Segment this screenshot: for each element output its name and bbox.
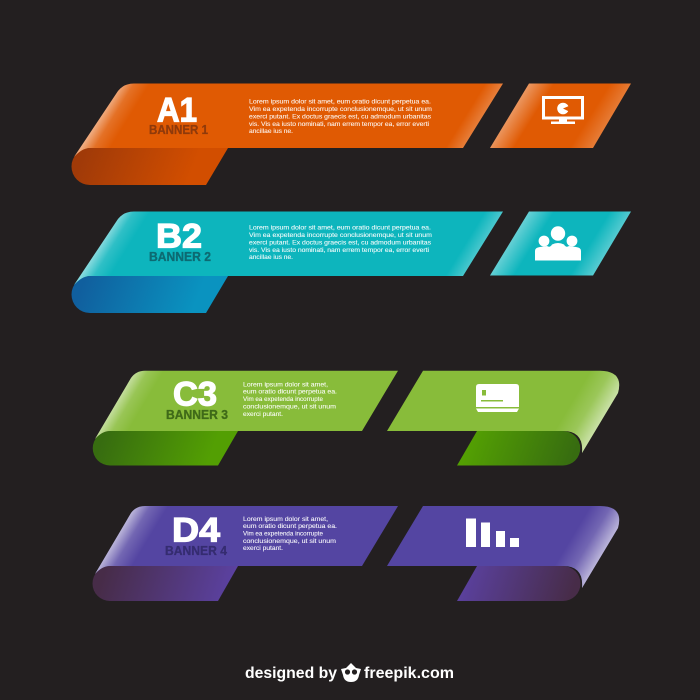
icon: people [535,226,581,260]
banner D4 [92,506,398,601]
text block A1: vis. Vis ea iusto nominati, nam errem tempor ea, error everti [249,121,430,128]
panel C3 fold [457,431,580,466]
label BANNER 3: BANNER 3 [166,408,228,422]
banner A1 [72,84,503,185]
banner A1 fold [72,148,228,185]
panel C3 main ribbon [387,371,619,453]
icon: bar chart [466,518,519,547]
text block B2: Lorem ipsum dolor sit amet, eum oratio dicunt perpetua ea. [249,225,431,232]
footer credit [245,663,454,682]
icon: monitor [542,96,584,124]
text block D4: exerci putant. [243,545,283,552]
text block D4 [243,516,337,552]
heading C3: C3 [173,376,217,414]
panel D4 fold [457,566,580,601]
footer credit: designed by [245,665,337,682]
text block B2: vis. Vis ea iusto nominati, nam errem tempor ea, error everti [249,247,430,254]
text block C3: Lorem ipsum dolor sit amet, [243,381,328,388]
text block C3 [243,381,337,418]
banner B2 [72,212,503,313]
text block C3: exerci putant. [243,411,283,418]
banner C3 main ribbon [95,371,398,439]
footer credit: freepik.com [364,665,454,682]
banner B2 main ribbon [74,212,503,285]
panel D4 with bar icon [387,506,619,601]
label BANNER 1: BANNER 1 [149,123,208,137]
icon: credit card [476,384,519,412]
heading D4: D4 [172,512,220,550]
text block A1: Lorem ipsum dolor sit amet, eum oratio dicunt perpetua ea. [249,99,431,106]
heading B2: B2 [156,218,202,256]
panel C3 with card icon [387,371,619,466]
text block B2: exerci putant. Ex doctus graecis est, cu admodum urbanitas [249,239,432,246]
banner D4 fold [92,566,238,601]
text block A1: exerci putant. Ex doctus graecis est, cu admodum urbanitas [249,113,432,120]
text block A1: Vim ea expetenda incorrupte conclusionemque, ut sit unum [249,106,433,113]
text block B2 [249,225,433,261]
label BANNER 4: BANNER 4 [165,544,227,558]
text block D4: Vim ea expetenda incorrupte [243,530,323,537]
panel B2 with people icon [490,212,631,276]
text block D4: Lorem ipsum dolor sit amet, [243,516,328,523]
banner C3 fold [93,431,238,466]
heading A1: A1 [157,92,197,130]
text block A1: ancillae ius ne. [249,128,293,135]
label BANNER 2: BANNER 2 [149,250,211,264]
text block C3: conclusionemque, ut sit unum [243,403,337,410]
banner A1 main ribbon [74,84,503,157]
text block B2: ancillae ius ne. [249,254,293,261]
banner C3 [93,371,398,466]
text block A1 [249,99,433,135]
banner D4 main ribbon [95,506,398,574]
text block C3: Vim ea expetenda incorrupte [243,396,323,403]
text block D4: eum oratio dicunt perpetua ea. [243,523,337,530]
icon: freepik mascot [341,663,361,682]
text block B2: Vim ea expetenda incorrupte conclusionemque, ut sit unum [249,232,433,239]
panel A1 with monitor icon [490,84,631,148]
banner B2 fold [72,276,228,313]
text block D4: conclusionemque, ut sit unum [243,538,337,545]
text block C3: eum oratio dicunt perpetua ea. [243,388,337,395]
panel D4 main ribbon [387,506,619,588]
